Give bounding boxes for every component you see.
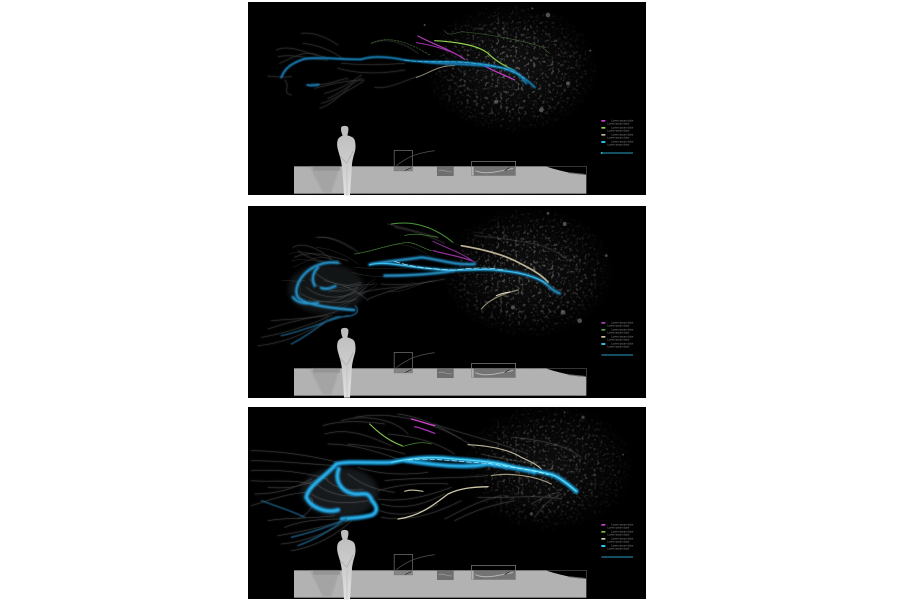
legend: Lorem ipsum dolor	[611, 119, 633, 123]
blue strands	[261, 458, 576, 546]
human figure	[337, 126, 356, 196]
ground section with inset frames	[294, 554, 586, 598]
ground section with inset frames	[294, 150, 586, 194]
soft streamlines	[251, 414, 581, 551]
legend: Lorem ipsum dolor	[611, 126, 633, 130]
legend: Lorem ipsum dolor	[607, 135, 629, 139]
particle cloud	[423, 2, 600, 135]
magenta strands	[433, 241, 475, 262]
blue strands	[281, 257, 560, 344]
human figure	[337, 328, 356, 398]
particle cloud	[440, 206, 616, 339]
legend: Lorem ipsum dolor	[607, 344, 629, 348]
legend: Lorem ipsum dolor	[607, 532, 629, 536]
legend: Lorem ipsum dolor	[607, 330, 629, 334]
legend	[601, 523, 633, 557]
panel: middle flow diagram	[248, 206, 646, 398]
magenta strand	[416, 36, 515, 80]
legend: Lorem ipsum dolor	[607, 142, 629, 146]
legend: Lorem ipsum dolor	[611, 321, 633, 325]
beige strand	[416, 66, 455, 77]
legend: Lorem ipsum dolor	[611, 133, 633, 137]
soft streamlines	[258, 224, 568, 346]
legend: Lorem ipsum dolor	[607, 121, 629, 125]
green strand	[370, 424, 431, 447]
ground section with inset frames	[294, 352, 586, 396]
legend: Lorem ipsum dolor	[607, 337, 629, 341]
legend: Lorem ipsum dolor	[611, 544, 633, 548]
green strand	[371, 31, 550, 71]
human figure	[337, 530, 356, 600]
legend: Lorem ipsum dolor	[611, 140, 633, 144]
green strands	[355, 223, 453, 254]
legend: Lorem ipsum dolor	[611, 530, 633, 534]
legend: Lorem ipsum dolor	[607, 539, 629, 543]
legend: Lorem ipsum dolor	[607, 128, 629, 132]
blue main strand	[281, 57, 535, 87]
legend	[601, 119, 633, 154]
legend: Lorem ipsum dolor	[611, 335, 633, 339]
grey streamlines	[268, 33, 418, 108]
legend: Lorem ipsum dolor	[607, 525, 629, 529]
panel: bottom flow diagram	[248, 402, 646, 600]
glow behind the loop	[301, 467, 378, 517]
fine streamlines	[258, 224, 568, 346]
panel: top flow diagram	[248, 2, 646, 196]
grey streamlines	[281, 237, 431, 312]
glow behind the loop	[288, 264, 365, 314]
legend: Lorem ipsum dolor	[611, 523, 633, 527]
grey streamlines	[251, 414, 581, 551]
soft streamlines	[268, 33, 418, 108]
particle cloud	[460, 402, 636, 532]
legend	[601, 321, 633, 355]
legend: Lorem ipsum dolor	[607, 546, 629, 550]
magenta strands	[411, 419, 435, 433]
legend: Lorem ipsum dolor	[611, 537, 633, 541]
legend: Lorem ipsum dolor	[611, 328, 633, 332]
legend: Lorem ipsum dolor	[607, 323, 629, 327]
legend: Lorem ipsum dolor	[611, 342, 633, 346]
beige strands	[398, 445, 551, 519]
beige strands	[461, 246, 548, 309]
